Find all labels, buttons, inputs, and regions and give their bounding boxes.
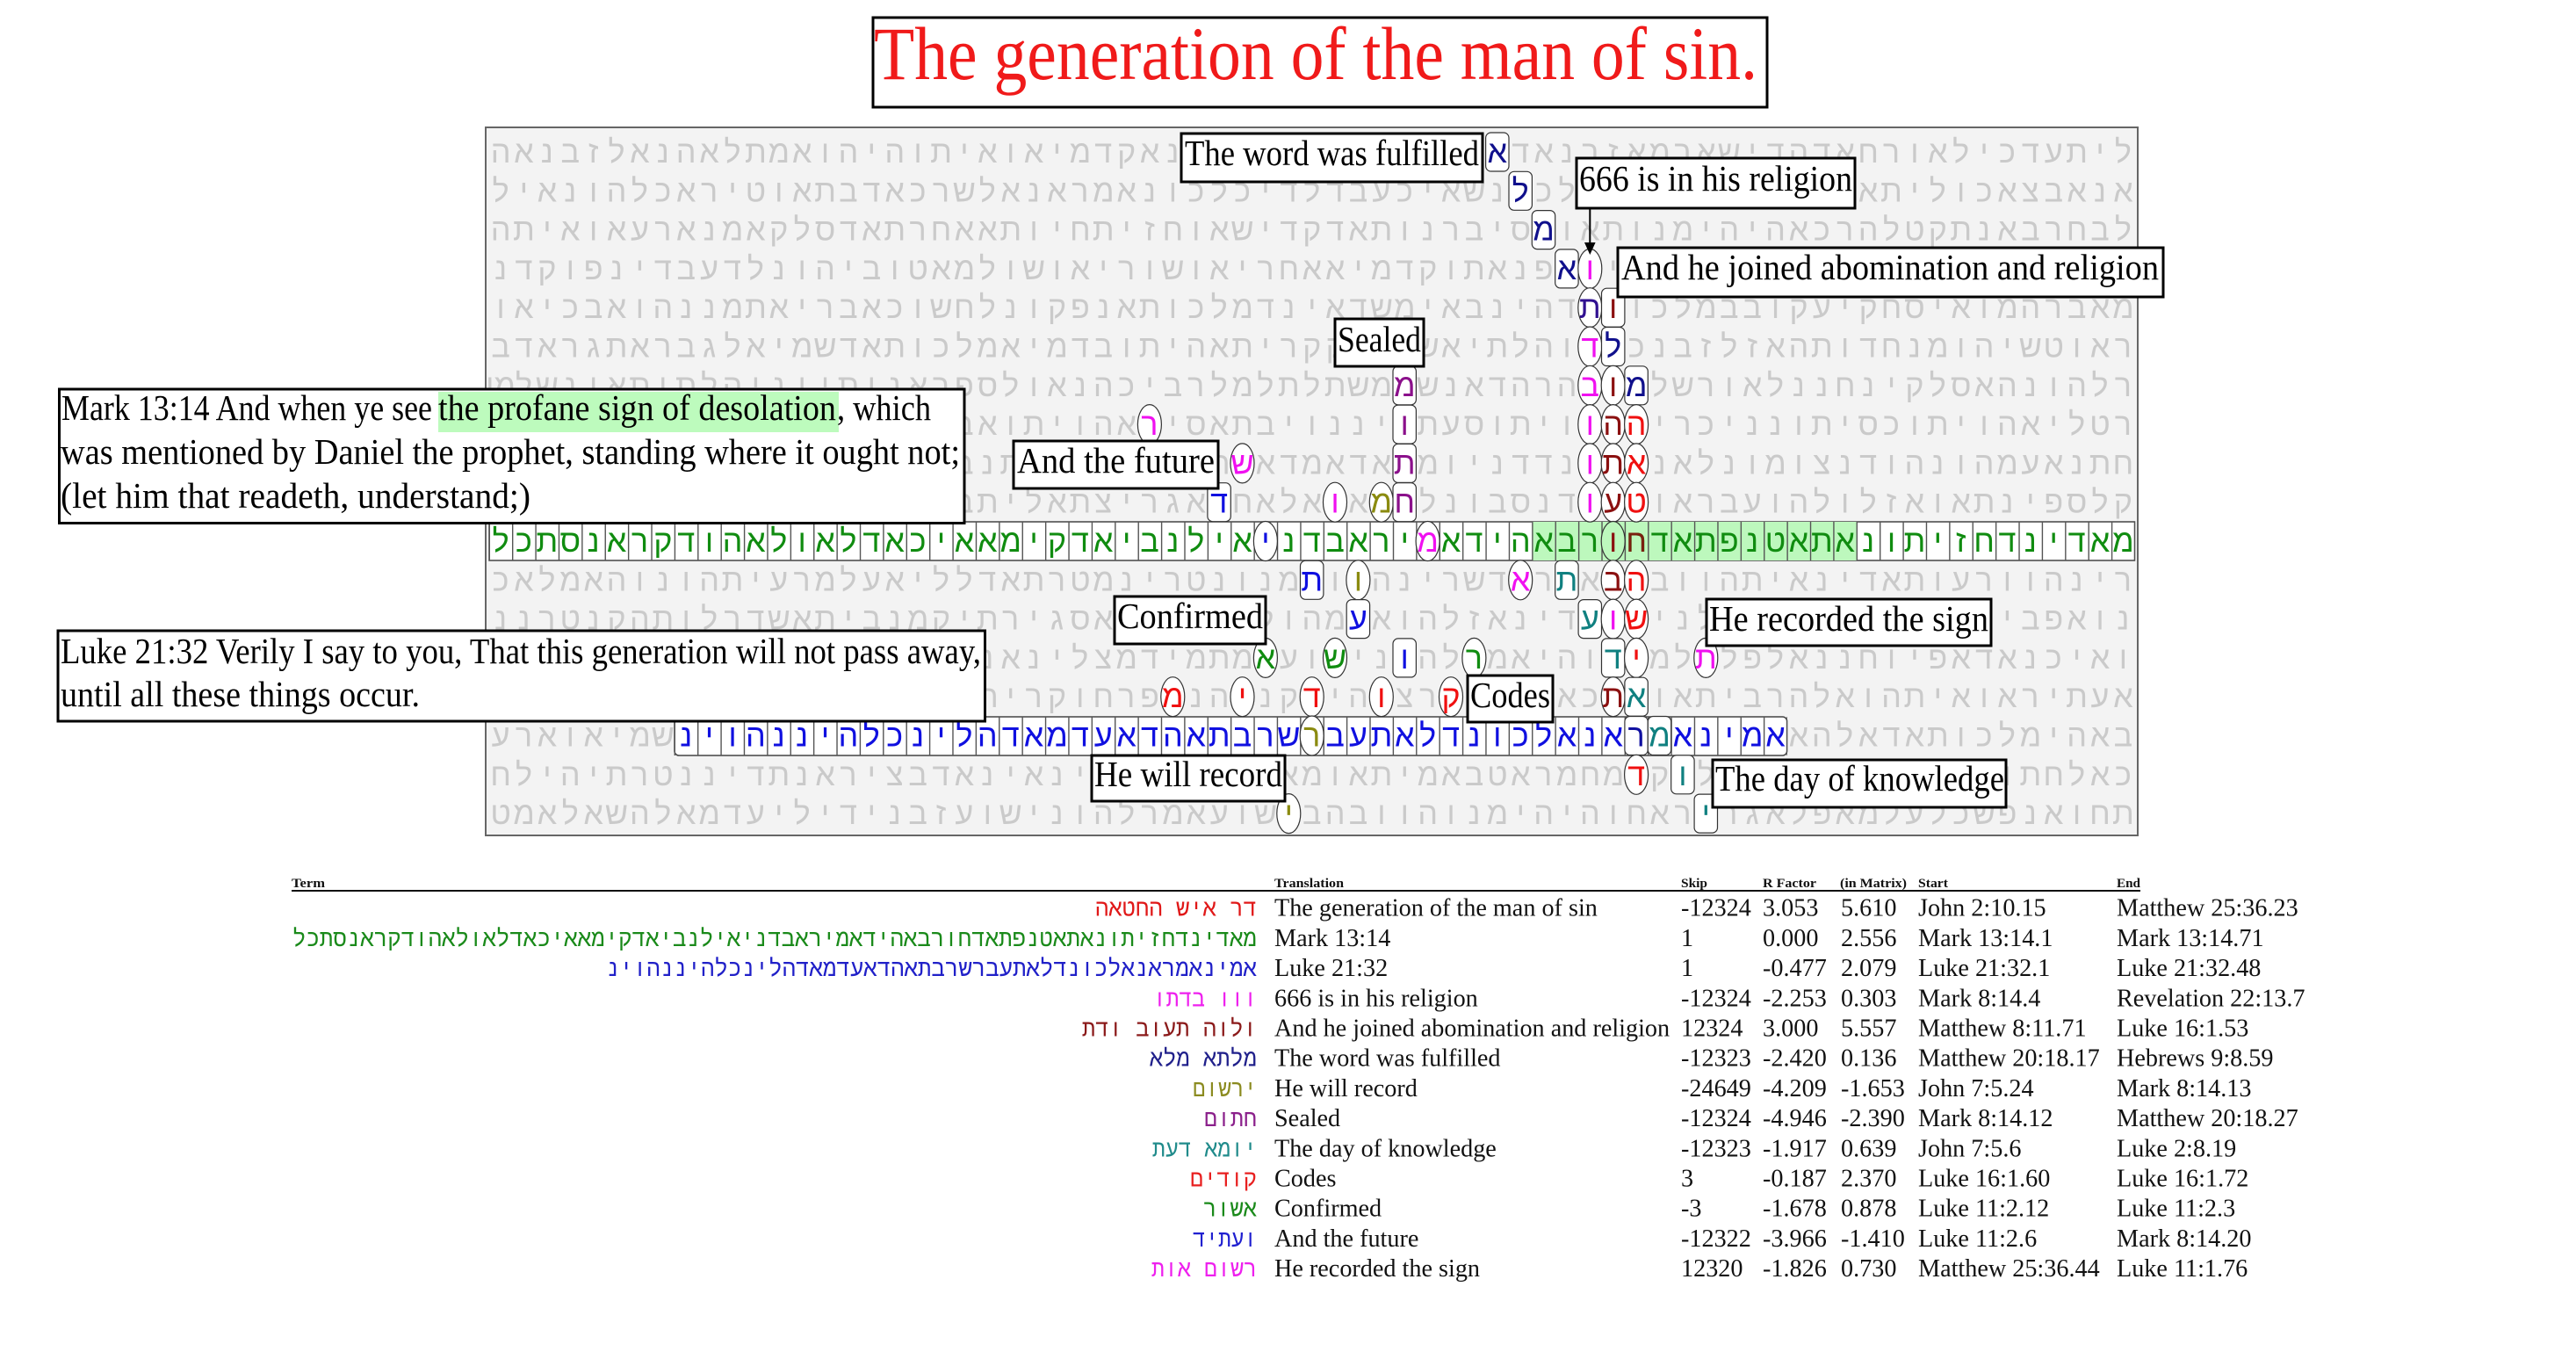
table row 1 [1095,895,2298,924]
table row 11: Luke 11:2.3 [2117,1196,2235,1223]
highlighted letters in the matrix: ד [1210,484,1228,520]
table row 5: And he joined abomination and religion [1274,1015,1670,1042]
grey letter matrix rows: ואיכנאדאפיוחננאלפלתלמידוהיאמרלהונישועאמתמידמצלינאנבמטולדאיתוהיכנאמראלוה [491,640,2127,676]
table row 9 [1152,1135,2236,1164]
table row 5: 3.000 [1763,1015,1818,1042]
table header: (in Matrix) [1840,877,1907,891]
table row 9: The day of knowledge [1274,1135,1497,1162]
highlighted letters in the matrix: י [1261,523,1270,559]
callout: Mark 13:14 verse: (let him that readeth, understand;) [61,475,530,516]
highlighted letters in the matrix: א [1487,134,1507,170]
table header: Translation [1274,877,1345,891]
highlighted letters in the matrix: ל [1512,172,1529,208]
table row 2: 2.556 [1841,925,1896,952]
grey letter matrix rows: ליתעדכילאורחאדהדישארמאזבנאדאדיהואמלכאנשאבנאקדמיאואיתוהיהואמתלאהנאלזבנאה [491,134,2132,170]
callout: Mark 13:14 verse: , which [837,387,931,428]
highlighted letters in the matrix: ע [1604,484,1622,520]
highlighted letters in the matrix: ד [1605,640,1622,676]
grey letter matrix rows: רינהוורעותאדינאיתהוובהבאתראדשרינהוותמנונטרינמטרתאדלליאעלמרעיתהונוהאמלאכ [493,561,2132,597]
highlighted letters in the matrix: ר [1627,717,1645,754]
highlighted letters in the matrix: ד [1581,329,1598,364]
table row 5: ולוה תעוב ודת [1082,1017,1257,1044]
callout: Mark 13:14 verse [60,387,964,524]
panel: letter matrix background [486,127,2138,835]
highlighted letters in the matrix: א [1627,678,1647,714]
grey letter matrix rows: אנאבצאכוליתאדשמעונהוכלאדלכלנשאיכעבדלדיכלכונאמראנאלשרכאדבתאוטיראכלהונאיל [493,172,2133,208]
highlighted letters in the matrix: ת [1602,444,1624,481]
callout: Mark 13:14 verse: the profane sign of desolation [438,387,836,428]
table header [292,877,2141,891]
grey letter matrix rows: באהימלכותאדאלהא [1789,718,2132,754]
highlighted letters in the matrix: ת [1695,640,1717,676]
highlighted letters in the matrix: ו [1609,367,1617,403]
table row 12: Mark 8:14.20 [2117,1225,2251,1253]
callout: Luke 21:32 verse: Luke 21:32 Verily I say to you, That this generation will not pass away, [61,631,981,671]
highlighted letters in the matrix: ו [1586,444,1594,481]
highlighted letters in the matrix: ח [1394,484,1415,520]
highlighted letters in the matrix: ת [1579,289,1601,325]
highlighted letters in the matrix: מ [1162,678,1184,714]
table row 7: Mark 8:14.13 [2117,1075,2251,1102]
grey letter matrix rows: ההואדאמרוהימנאדיכתיבאדיואפנאתוקדמיאאחריאושוריאושולמאטוביהונלדעבדינפוקדנ [494,250,2133,286]
table row 5: 5.557 [1841,1015,1896,1042]
highlighted letters in the matrix: ט [1626,484,1647,520]
highlighted letters in the matrix: ח [1626,523,1647,559]
table row 10: 2.370 [1841,1165,1896,1193]
highlighted letters in the matrix: ק [1441,678,1461,714]
table row 7: ירשום [1193,1078,1257,1104]
table row 6 [1150,1045,2273,1074]
table row 5 [1082,1015,2248,1044]
table row 10: 3 [1681,1165,1693,1193]
table row 7: -24649 [1681,1075,1751,1102]
table header: Term [292,877,326,891]
table row 11 [1203,1196,2235,1225]
table row 4: Revelation 22:13.7 [2117,985,2305,1012]
table row 7: -4.209 [1763,1075,1827,1102]
table row 1: The generation of the man of sin [1274,895,1598,922]
grey letter matrix rows: ראוטשיהומנחדותהאזלזבנכלדוהלתיאשנאדקקריתאהיתובדמיאמלכותאדשמיאלגבראתגראדב [491,329,2132,365]
table row 10: Codes [1274,1165,1336,1193]
table header: R Factor [1763,877,1816,891]
highlighted letters in the matrix: ר [1303,717,1320,754]
table row 9: -12323 [1681,1135,1751,1162]
table row 12: And the future [1274,1225,1418,1253]
table row 2: Mark 13:14.71 [2117,925,2264,952]
highlighted letters in the matrix: י [1702,795,1710,831]
table row 12 [1193,1225,2251,1254]
table row 10: Luke 16:1.60 [1918,1165,2050,1193]
highlighted letters in the matrix: ר [1466,640,1483,676]
grey letter matrix rows: קלספינתאואזלולהועבראוטעודנסבונלחמאואלאחדאגריצתאליתבמטולדאיתוהיכנאמראלוה [491,484,2132,520]
highlighted letters in the matrix: ו [1377,678,1385,714]
highlighted letters in the matrix: ו [1401,640,1409,676]
grey letter matrix rows: לבחרבאנתקטלהרכאהיהימנותאומסיברנותאדקדישאוחזיתחיותאאחרתאדסלקאמנארעאואיתה [491,212,2132,248]
table header: Start [1918,877,1948,891]
table row 13: רשום אות [1151,1258,1257,1284]
highlighted letters in the matrix: ב [1604,561,1622,597]
table row 13: 0.730 [1841,1255,1896,1283]
table row 13: -1.826 [1763,1255,1827,1283]
table row 11: 0.878 [1841,1196,1896,1223]
grey letter matrix rows: שמיאוארע [492,718,675,754]
table row 6: The word was fulfilled [1274,1045,1501,1073]
Luke 21:32 letter row: אמינאמראנאלכונדלאתעברשרבתאהדאעדמאדהלינכלהיננהוינ [680,718,1786,754]
table row 1: 3.053 [1763,895,1818,922]
table row 3 [606,955,2261,984]
table row 6: -12323 [1681,1045,1751,1073]
highlighted letters in the matrix: א [1557,250,1577,286]
highlighted letters in the matrix: ת [1555,561,1577,597]
table row 2: Mark 13:14.1 [1918,925,2053,952]
grey letter matrix rows: אעתיראואיתהואלהרביתאואתכאלאשנקרצוהידקניהנמפרחוקריתבמטולדאיתוהיכנאמראלוה [491,678,2133,714]
highlighted letters in the matrix: י [1632,640,1641,676]
table row 11: אשור [1203,1198,1257,1225]
grey letter matrix rows: כאלחתובאמרהוכאשראללוקדמחמראטבאמיתאומאלנהורכנאינאינאדבציראנתדיננטרתיהילח [490,756,2132,792]
table row 2: 0.000 [1763,925,1818,952]
highlighted letters in the matrix: ת [1394,444,1416,481]
table row 11: Luke 11:2.12 [1918,1196,2049,1223]
grey letter matrix rows: רטליאהויתוכסיתונניכריההוויתוסעתויננויבתאסיראהויתואבמטולדאיתוהיכנאמראלוה [491,406,2132,442]
highlighted letters in the matrix: מ [1649,717,1670,754]
table row 9: 0.639 [1841,1135,1896,1162]
highlighted letters in the matrix: ש [1324,640,1346,676]
table row 3: Luke 21:32 [1274,955,1388,982]
table row 4: -2.253 [1763,985,1827,1012]
table row 13: He recorded the sign [1274,1255,1480,1283]
highlighted letters in the matrix: ו [1354,561,1362,597]
highlighted letters in the matrix [1137,133,1718,834]
highlighted letters in the matrix: י [1238,678,1246,714]
table row 4: Mark 8:14.4 [1918,985,2040,1012]
highlighted letters in the matrix: ו [1586,250,1594,286]
table row 1: John 2:10.15 [1918,895,2046,922]
grey letter matrix rows [486,134,2134,831]
table row 6: 0.136 [1841,1045,1896,1073]
callout: Luke 21:32 verse [58,631,985,721]
callout: The word was fulfilled: The word was fulfilled [1185,133,1479,173]
highlighted letters in the matrix: ה [1627,406,1647,442]
highlighted letters in the matrix: א [1256,640,1276,676]
table row 8: -2.390 [1841,1105,1905,1132]
table row 3: -0.477 [1763,955,1827,982]
highlighted letters in the matrix: ע [1349,601,1367,637]
callout: Sealed: Sealed [1338,319,1421,359]
table row 1: -12324 [1681,895,1751,922]
table row 12: -1.410 [1841,1225,1905,1253]
highlighted letters in the matrix: ה [1627,561,1647,597]
table row 6: מלתא מלא [1150,1047,1257,1074]
table row 12: Luke 11:2.6 [1918,1225,2037,1253]
table row 11: -3 [1681,1196,1701,1223]
table row 8: Sealed [1274,1105,1340,1132]
callout: The day of knowledge: The day of knowledge [1715,758,2004,799]
callout: Confirmed: Confirmed [1117,596,1263,636]
highlighted letters in the matrix: ב [1581,367,1599,403]
table row 13: 12320 [1681,1255,1743,1283]
table row 12: ועתיד [1193,1228,1257,1254]
table row 3: 2.079 [1841,955,1896,982]
callout: 666 is in his religion: 666 is in his religion [1579,158,1852,199]
table row 3: Luke 21:32.1 [1918,955,2050,982]
highlighted letters in the matrix: ע [1581,601,1599,637]
table row 9: Luke 2:8.19 [2117,1135,2236,1162]
highlighted letters in the matrix: א [1511,561,1531,597]
highlighted letters in the matrix: ת [1602,678,1624,714]
callout: And he joined abomination and religion: And he joined abomination and religion [1621,247,2159,287]
table: terms [292,877,2305,1284]
table row 7: He will record [1274,1075,1418,1102]
callout: He recorded the sign: He recorded the sign [1709,598,1988,639]
table row 4: 666 is in his religion [1274,985,1478,1012]
table row 8 [1204,1105,2298,1134]
table row 12: -3.966 [1763,1225,1827,1253]
arrow: 666 callout to letter [1584,208,1596,255]
table row 1: Matthew 25:36.23 [2117,895,2298,922]
highlighted letters in the matrix: ו [1586,406,1594,442]
highlighted letters in the matrix: מ [1370,484,1392,520]
table row 2: Mark 13:14 [1274,925,1390,952]
table row 5: Matthew 8:11.71 [1918,1015,2087,1042]
highlighted letters in the matrix: ו [1609,289,1617,325]
highlighted letters in the matrix: ד [1627,756,1645,792]
table row 10: קודים [1190,1168,1257,1195]
grey letter matrix rows: מאברהמואיסחקיעקובבמלכוותדהינבאימשדאינדמלכותאנפקונלחשוכאבריאתמננהואבכיאו [496,289,2134,325]
table row 6: Hebrews 9:8.59 [2117,1045,2273,1073]
callout: Luke 21:32 verse: until all these things occur. [61,674,420,714]
table row 13: Luke 11:1.76 [2117,1255,2248,1283]
grey letter matrix rows: תחואנפשכלעלמאפלאגריראחוהיהימנוהוובהבישועאמרלהונישועזבנידיליעדמאלהשאלאמט [490,795,2134,831]
table row 2: 1 [1681,925,1693,952]
table row 10: -0.187 [1763,1165,1827,1193]
table row 13 [1151,1255,2248,1284]
table row 11: Confirmed [1274,1196,1382,1223]
highlighted letters in the matrix: ת [1301,561,1323,597]
table row 4: -12324 [1681,985,1751,1012]
highlighted letters in the matrix: י [1285,795,1293,831]
highlighted letters in the matrix: מ [1394,367,1416,403]
table header: End [2117,877,2141,891]
table row 8: Matthew 20:18.27 [2117,1105,2298,1132]
highlighted letters in the matrix: מ [1626,367,1647,403]
table row 4: 0.303 [1841,985,1896,1012]
highlighted letters in the matrix: ל [1605,329,1621,364]
table row 3: Luke 21:32.48 [2117,955,2261,982]
highlighted letters in the matrix: מ [1417,523,1439,559]
table row 7: John 7:5.24 [1918,1075,2034,1102]
grey letter matrix rows: רלהונהאסלקינחננלאורשלמובהרהדאנשאמשתלתלמלרביכהנאולספראנותיוניהלתותאונשלמו [486,367,2132,403]
callout: And the future: And the future [1017,440,1215,481]
table row 6: -2.420 [1763,1045,1827,1073]
table row 8: -12324 [1681,1105,1751,1132]
highlighted letters in the matrix: ד [1303,678,1321,714]
table row 8: Mark 8:14.12 [1918,1105,2053,1132]
callout: Codes: Codes [1470,675,1550,715]
grey letter matrix rows: חתנאעמהונהודנצומונלאנאתונדדניומתאדאמדאשתלמידיהואתנבמטולדאיתוהיכנאמראלוה [491,444,2133,481]
highlighted letters in the matrix: ו [1401,406,1409,442]
highlighted letters in the matrix: ו [1331,484,1339,520]
table row 6: Matthew 20:18.17 [1918,1045,2100,1073]
callout: He will record: He will record [1094,754,1282,794]
highlighted letters in the matrix: ו [1586,484,1594,520]
highlighted letters in the matrix: ש [1230,444,1254,481]
table row 5: 12324 [1681,1015,1743,1042]
table row 9: יומא דעת [1152,1138,1257,1164]
table header: Skip [1681,877,1707,891]
table row 10 [1190,1165,2248,1195]
table row 7 [1193,1075,2251,1104]
callout: Mark 13:14 verse: Mark 13:14 And when ye see [61,387,432,428]
table row 8: -4.946 [1763,1105,1827,1132]
table row 11: -1.678 [1763,1196,1827,1223]
table row 2: מאדינדחזיתונאתאטנפתאדחורבאהידאמיראבדניאילנביאדקימאאיכאדלאולאהודקראנסתכל [292,927,1257,954]
title: The generation of the man of sin. [874,11,1757,96]
table row 4: ווו בדתו [1153,987,1257,1014]
table row 8: חתום [1204,1108,1257,1134]
highlighted letters in the matrix: ר [1141,406,1158,442]
Mark 13:14 letter row: מאדינדחזיתונאתאטנפתאדחורבאהידאמיראבדניאילנביאדקימאאיכאדלאולאהודקראנסתכל [493,523,2134,559]
table row 10: Luke 16:1.72 [2117,1165,2248,1193]
highlighted letters in the matrix: ו [1678,756,1687,792]
table row 12: -12322 [1681,1225,1751,1253]
table row 7: -1.653 [1841,1075,1905,1102]
highlighted letters in the matrix: מ [1533,212,1555,248]
table row 2 [292,925,2264,954]
table row 9: John 7:5.6 [1918,1135,2021,1162]
grey letter matrix rows: נואפבידאמרלהמשיחאללנישועדינאזלהואעמהולכוננאואסגירתיקמנביתאשדרלותהקנטרננ [494,601,2129,637]
table row 1: 5.610 [1841,895,1896,922]
highlighted letters in the matrix: ו [1609,601,1617,637]
table row 1: דר איש החטאה [1095,898,1257,924]
table row 3: 1 [1681,955,1693,982]
callout: Mark 13:14 verse: was mentioned by Daniel the prophet, standing where it ought not; [61,431,960,472]
table row 13: Matthew 25:36.44 [1918,1255,2100,1283]
table row 9: -1.917 [1763,1135,1827,1162]
highlighted letters in the matrix: ו [1609,523,1617,559]
table row 4 [1153,985,2305,1014]
highlighted letters in the matrix: א [1627,444,1647,481]
table row 5: Luke 16:1.53 [2117,1015,2248,1042]
highlighted letters in the matrix: ה [1603,406,1623,442]
table row 3: אמינאמראנאלכונדלאתעברשרבתאהדאעדמאדהלינכלהיננהוינ [606,957,1257,984]
highlighted letters in the matrix: ש [1625,601,1648,637]
